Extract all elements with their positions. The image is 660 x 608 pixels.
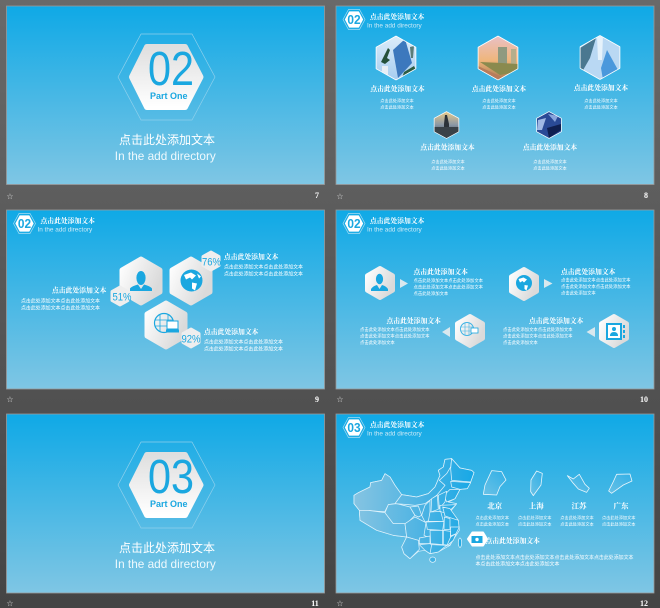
region labels: 点击此处添加文本: [476, 520, 510, 528]
Chinese subtitle: 点击此处添加文本: [119, 540, 215, 555]
text block: left: 点击此处添加文本点击此处添加文本: [21, 298, 100, 304]
region labels: 点击此处添加文本: [560, 520, 595, 528]
photo hexagon 4: [434, 112, 459, 138]
captions row 2: 点击此处添加文本: [523, 142, 577, 152]
captions row 1: 点击此处添加文本: [584, 104, 619, 110]
region labels: 广东: [614, 500, 629, 510]
badge: 76%: [202, 252, 221, 270]
page number 8: 8: [644, 191, 648, 200]
item: person: 点击此处添加文本点击此处添加文本: [414, 284, 484, 290]
page number 12: 12: [640, 599, 648, 608]
region labels: 江苏: [572, 500, 588, 510]
captions row 1: 点击此处添加文本: [574, 83, 628, 92]
item: globe: 点击此处添加文本: [561, 290, 596, 296]
arrow left: [586, 327, 595, 337]
item: person: 点击此处添加文本: [414, 290, 449, 297]
footer star 8: ☆: [336, 192, 344, 201]
item: globe: 点击此处添加文本点击此处添加文本: [561, 283, 631, 290]
header badge and title: 02: [347, 217, 361, 231]
header badge and title: In the add directory: [367, 226, 423, 234]
page number 11: 11: [311, 599, 319, 608]
captions row 2: 点击此处添加文本: [533, 158, 568, 165]
hexagon: person: [122, 259, 160, 303]
item: contact book: 点击此处添加文本: [529, 316, 584, 325]
text block: right bottom: 点击此处添加文本点击此处添加文本: [204, 346, 283, 352]
header badge and title: 点击此处添加文本: [370, 420, 425, 429]
region labels: 点击此处添加文本: [602, 520, 636, 528]
captions row 2: 点击此处添加文本: [533, 164, 568, 172]
badge: 76%: 76%: [202, 256, 221, 268]
header badge and title: In the add directory: [367, 430, 423, 438]
region labels: 上海: [529, 500, 544, 510]
item: contact book: [503, 316, 627, 346]
captions row 1: 点击此处添加文本: [370, 84, 425, 93]
inner white hexagon: [132, 455, 200, 515]
text block: right bottom: 点击此处添加文本点击此处添加文本: [204, 338, 283, 346]
number 02: 02: [148, 43, 194, 96]
region labels: 点击此处添加文本: [518, 514, 552, 521]
header badge and title: [343, 214, 425, 234]
captions row 1: 点击此处添加文本: [472, 84, 526, 93]
header badge and title: 点击此处添加文本: [40, 216, 95, 225]
photo hexagon 2: [478, 36, 518, 80]
item: network devices: 点击此处添加文本点击此处添加文本: [360, 326, 430, 333]
footer star 10: ☆: [336, 395, 344, 404]
text block: map description: 点击此处添加文本点击此处添加文本点击此处添加文本点击此处添加文本: [476, 554, 634, 561]
captions row 1: [370, 83, 628, 110]
header badge and title: [343, 10, 425, 30]
region labels: 点击此处添加文本: [602, 514, 636, 521]
badge: 92%: [182, 329, 201, 347]
header badge and title: 02: [347, 13, 361, 27]
region labels: 点击此处添加文本: [476, 514, 510, 521]
arrow left: [442, 327, 450, 337]
captions row 2: 点击此处添加文本: [431, 164, 466, 172]
text block: map description: [476, 536, 634, 568]
header badge and title: [343, 418, 425, 438]
number 03: 03: [148, 451, 194, 504]
text block: left: 点击此处添加文本: [52, 286, 107, 294]
region labels: 北京: [487, 500, 503, 510]
badge: 51%: [112, 287, 132, 305]
Part One label: Part One: [150, 91, 188, 101]
item: network devices: 点击此处添加文本点击此处添加文本: [360, 332, 430, 340]
footer star 12: ☆: [336, 599, 344, 608]
text block: right top: 点击此处添加文本点击此处添加文本: [224, 270, 303, 278]
photo hexagon 3: [580, 36, 620, 80]
header badge and title: In the add directory: [38, 226, 93, 234]
page number 7: 7: [315, 191, 319, 200]
panel: slide 7 section cover: [6, 6, 324, 184]
captions row 1: 点击此处添加文本: [584, 97, 619, 104]
item: person: 点击此处添加文本点击此处添加文本: [414, 277, 484, 284]
text block: map description: 本点击此处添加文本点击此处添加文本: [476, 560, 559, 568]
small region maps: [483, 471, 632, 496]
region labels: 点击此处添加文本: [518, 520, 552, 528]
text block: right top: 点击此处添加文本: [224, 252, 279, 261]
captions row 2: 点击此处添加文本: [431, 158, 466, 165]
outer hexagon outline: [118, 442, 215, 528]
text block: right top: [224, 252, 303, 278]
English subtitle: In the add directory: [115, 557, 216, 571]
page number 10: 10: [640, 395, 648, 404]
item: person: 点击此处添加文本: [414, 267, 468, 276]
captions row 1: 点击此处添加文本: [380, 97, 415, 104]
footer star 9: ☆: [6, 395, 14, 404]
Part One label: Part One: [150, 499, 188, 509]
badge: 51%: 51%: [112, 292, 132, 304]
captions row 1: 点击此处添加文本: [380, 104, 415, 110]
footer star 7: ☆: [6, 192, 14, 201]
item: globe: 点击此处添加文本: [561, 267, 616, 276]
text block: right bottom: 点击此处添加文本: [204, 327, 259, 336]
hexagon: network devices: [147, 303, 185, 347]
header badge and title: [14, 214, 95, 234]
item: person: [367, 267, 484, 298]
text block: left: 点击此处添加文本点击此处添加文本: [21, 304, 100, 312]
header badge and title: In the add directory: [367, 22, 423, 30]
page number 9: 9: [315, 395, 319, 404]
panel: slide 8 photos: [336, 6, 654, 184]
map of China: [354, 459, 474, 562]
header badge and title: 03: [347, 421, 361, 435]
panel: slide 9 percentages: [6, 210, 324, 389]
badge: 92%: 92%: [182, 334, 201, 346]
item: network devices: [360, 316, 483, 346]
Chinese subtitle: 点击此处添加文本: [119, 132, 215, 147]
item: contact book: 点击此处添加文本点击此处添加文本: [503, 332, 573, 340]
text block: left: [21, 286, 107, 312]
captions row 1: 点击此处添加文本: [482, 104, 517, 110]
photo hexagon 5: [537, 112, 561, 138]
region labels: 点击此处添加文本: [560, 514, 595, 521]
item: network devices: 点击此处添加文本: [360, 339, 395, 346]
item: globe: 点击此处添加文本点击此处添加文本: [561, 276, 631, 284]
icon: camera hexagon: [468, 532, 487, 546]
arrow right: [544, 279, 552, 288]
captions row 2: 点击此处添加文本: [420, 142, 475, 152]
hexagon: globe: [172, 259, 210, 303]
footer star 11: ☆: [6, 599, 14, 608]
English subtitle: In the add directory: [115, 149, 216, 163]
item: network devices: 点击此处添加文本: [386, 316, 441, 325]
text block: map description: 点击此处添加文本: [486, 536, 540, 545]
inner white hexagon: [132, 47, 200, 107]
panel: slide 12 map: [336, 414, 654, 593]
item: globe: [511, 267, 631, 299]
outer hexagon outline: [118, 34, 215, 120]
text block: right bottom: [204, 327, 283, 352]
panel: slide 10 four items: [336, 210, 654, 389]
region labels: [476, 500, 636, 528]
captions row 1: 点击此处添加文本: [482, 97, 517, 104]
header badge and title: 点击此处添加文本: [370, 216, 425, 225]
arrow right: [400, 279, 408, 288]
item: contact book: 点击此处添加文本: [503, 339, 538, 346]
item: contact book: 点击此处添加文本点击此处添加文本: [503, 326, 573, 333]
header badge and title: 点击此处添加文本: [370, 12, 425, 21]
text block: right top: 点击此处添加文本点击此处添加文本: [224, 264, 303, 270]
captions row 2: [420, 142, 577, 172]
panel: slide 11 section cover: [6, 414, 324, 593]
photo hexagon 1: [376, 36, 416, 80]
header badge and title: 02: [18, 217, 31, 231]
